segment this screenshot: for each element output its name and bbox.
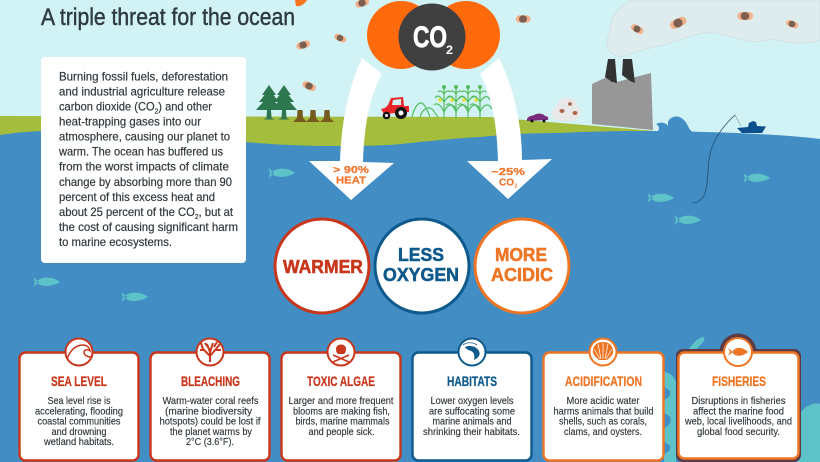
- smoke cloud: [607, 0, 820, 57]
- icon: car: [527, 114, 548, 122]
- panel: intro text: carbon dioxide (CO: [59, 100, 162, 114]
- arrow: CO2 into ocean: [467, 58, 552, 199]
- icon: trees: [256, 85, 297, 120]
- panel: sea level: SEA LEVEL: [51, 374, 107, 389]
- CO2 molecule emblem: [367, 1, 500, 70]
- panel: intro text: from the worst impacts of climate: [59, 160, 229, 174]
- panel: toxic algae: blooms are making fish,: [293, 406, 390, 418]
- circle: warmer: [275, 219, 369, 313]
- icon: wave: [66, 338, 92, 366]
- circle: less oxygen: OXYGEN: [383, 264, 459, 285]
- panel: bleaching: (marine biodiversity: [165, 406, 253, 418]
- panel: intro text: the cost of causing significant harm: [59, 220, 238, 234]
- icon: corn field: [412, 85, 492, 118]
- circle: more acidic: ACIDIC: [491, 264, 553, 285]
- icon: shell: [590, 338, 616, 366]
- panel: habitats: marine animals and: [432, 416, 512, 428]
- icon: factory: [592, 59, 653, 130]
- panel: bleaching: 2°C (3.6°F).: [186, 437, 234, 448]
- panel: sea level: and drowning: [52, 427, 107, 438]
- panel: bleaching: hotspots) could be lost if: [160, 416, 261, 428]
- panel: habitats: Lower oxygen levels: [430, 396, 514, 407]
- land: [0, 116, 655, 150]
- panel: intro text: [41, 57, 246, 263]
- icon: coral: [196, 338, 224, 366]
- arrow: CO2 into ocean: ~25%: [491, 166, 526, 178]
- panel: sea level: accelerating, flooding: [35, 406, 123, 418]
- panel: sea level: wetland habitats.: [43, 437, 114, 448]
- panel: intro text: 2: [195, 214, 199, 221]
- panel: intro text: 2: [155, 108, 158, 116]
- panel: intro text: ) and other: [158, 100, 212, 114]
- panel: acidification: ACIDIFICATION: [565, 374, 642, 389]
- panel: toxic algae: Larger and more frequent: [288, 396, 394, 407]
- circle: more acidic: MORE: [495, 244, 547, 265]
- icon: shrimp: [458, 338, 486, 366]
- panel: habitats: are suffocating some: [429, 406, 515, 418]
- panel: acidification: [544, 338, 664, 460]
- panel: sea level: Sea level rise is: [48, 396, 110, 407]
- panel: acidification: harms animals that build: [554, 406, 654, 418]
- arrow: heat into ocean: > 90%: [333, 164, 370, 176]
- panel: bleaching: BLEACHING: [181, 374, 240, 389]
- icon: fishing boat and line: [692, 115, 766, 203]
- fish: [34, 168, 770, 302]
- panel: fisheries: FISHERIES: [712, 374, 766, 389]
- arrow: CO2 into ocean: 2: [514, 184, 518, 190]
- icon: tree stumps: [293, 110, 334, 122]
- panel: habitats: shrinking their habitats.: [423, 427, 520, 438]
- CO2 molecule emblem: 2: [446, 43, 453, 57]
- panel: acidification: clams, and oysters.: [564, 427, 642, 438]
- panel: toxic algae: and people sick.: [308, 427, 374, 438]
- arrow: CO2 into ocean: CO: [499, 176, 514, 188]
- panel: intro text: heat-trapping gases into our: [59, 114, 201, 128]
- panel: bleaching: the planet warms by: [170, 427, 253, 438]
- ocean: [0, 131, 820, 462]
- panel: acidification: More acidic water: [566, 396, 640, 407]
- panel: toxic algae: [282, 338, 400, 460]
- panel: sea level: [20, 338, 138, 460]
- panel: intro text: about 25 percent of the CO: [59, 205, 204, 219]
- panel: intro text: , but at: [199, 205, 234, 219]
- icon: fish: [724, 338, 752, 366]
- panel: sea level: coastal communities: [38, 416, 120, 428]
- panel: intro text: and industrial agriculture release: [59, 84, 225, 98]
- icon: waves: [656, 116, 693, 133]
- circle: less oxygen: [375, 219, 469, 313]
- arrow: heat into ocean: HEAT: [336, 174, 367, 186]
- icon: tractor: [381, 97, 409, 119]
- panel: habitats: HABITATS: [447, 374, 497, 389]
- circle: more acidic: [475, 219, 569, 313]
- panel: toxic algae: TOXIC ALGAE: [307, 374, 375, 389]
- panel: intro text: change by absorbing more than 90: [59, 175, 232, 189]
- coral silhouettes: [664, 337, 820, 462]
- CO2 molecules: [295, 0, 799, 92]
- panel: habitats: [412, 338, 532, 460]
- title: A triple threat for the ocean: [41, 4, 295, 31]
- panel: fisheries: [676, 334, 801, 462]
- panel: fisheries: web, local livelihoods, and: [684, 416, 792, 428]
- panel: intro text: atmosphere, causing our planet to: [59, 130, 230, 144]
- CO2 molecule emblem: CO: [413, 21, 447, 54]
- arrow: heat into ocean: [309, 58, 394, 200]
- panel: fisheries: Disruptions in fisheries: [692, 396, 786, 407]
- panel: intro text: warm. The ocean has buffered us: [58, 144, 223, 158]
- circle: warmer: WARMER: [283, 256, 363, 277]
- panel: bleaching: Warm-water coral reefs: [162, 396, 258, 407]
- car exhaust cloud: [552, 98, 581, 121]
- panel: fisheries: affect the marine food: [693, 406, 784, 418]
- panel: acidification: shells, such as corals,: [559, 416, 647, 428]
- panel: intro text: to marine ecosystems.: [59, 235, 172, 249]
- panel: bleaching: [150, 338, 270, 460]
- panel: intro text: Burning fossil fuels, deforestation: [59, 70, 228, 84]
- panel: fisheries: global food security.: [697, 427, 780, 438]
- panel: toxic algae: birds, marine mammals: [296, 416, 390, 428]
- panel: intro text: percent of this excess heat and: [59, 190, 215, 204]
- icon: skull and crossbones: [328, 338, 354, 366]
- circle: less oxygen: LESS: [398, 244, 444, 265]
